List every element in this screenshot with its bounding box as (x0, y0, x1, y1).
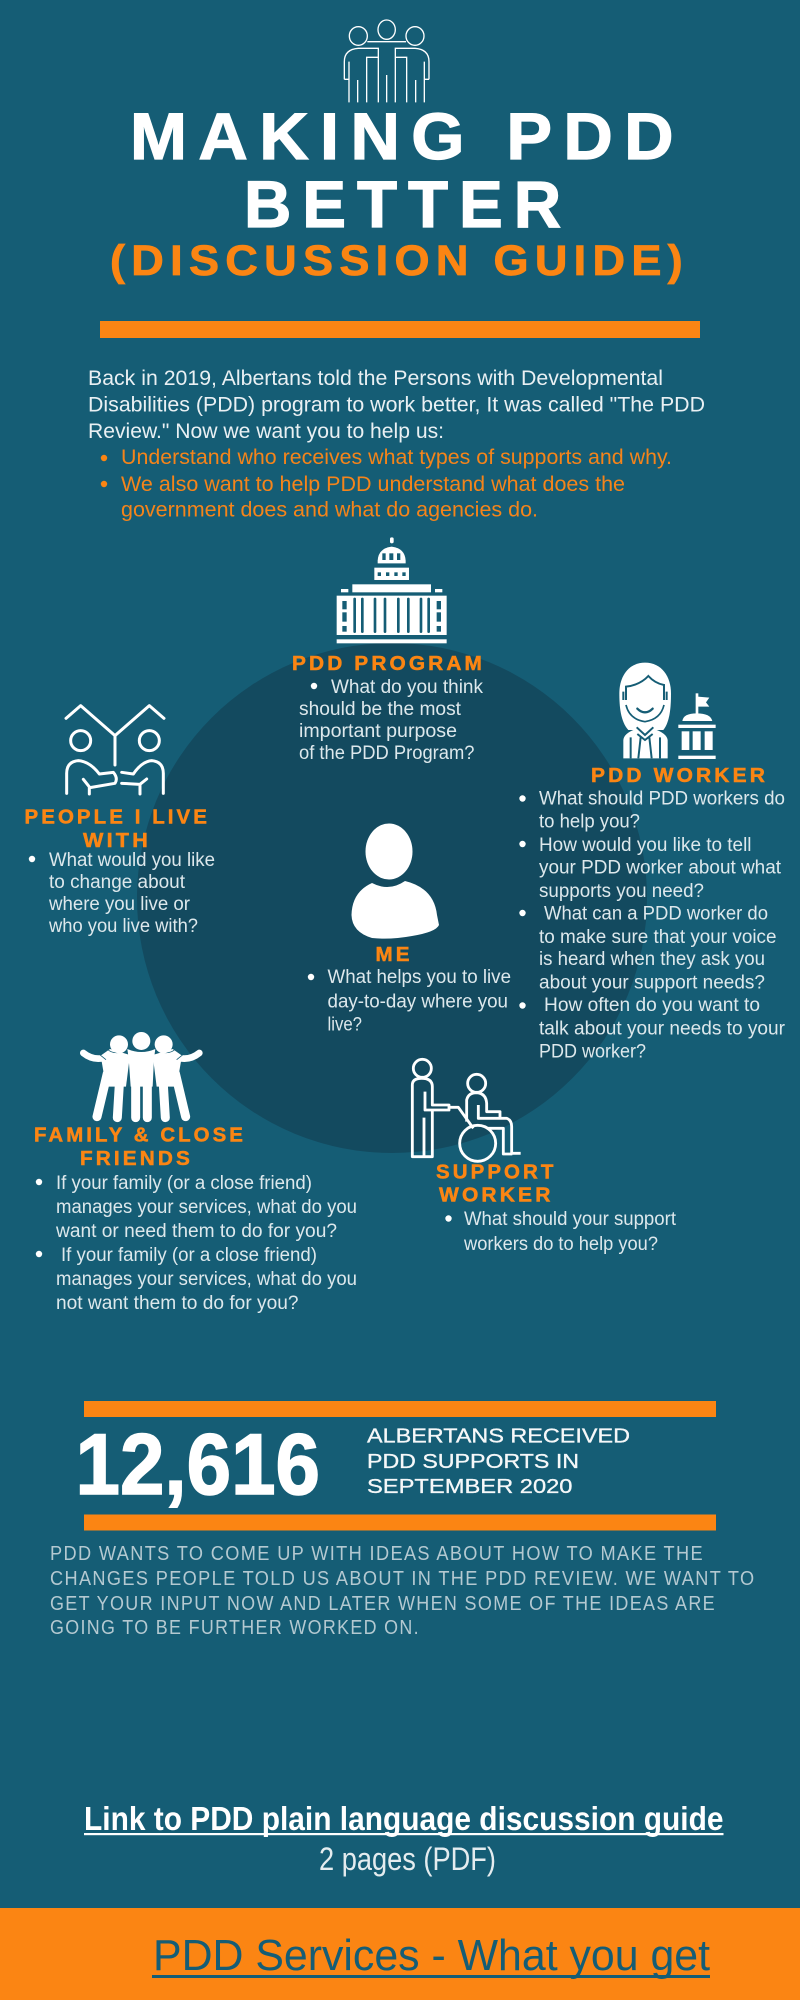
heading: support worker: WORKER (439, 1184, 554, 1206)
heading: PDD worker: PDD WORKER (591, 765, 768, 787)
icon: three friends arm in arm (83, 1032, 199, 1118)
panel: statistic (76, 1401, 716, 1530)
questions: people I live with: where you live or (48, 894, 191, 915)
questions: support worker (445, 1209, 677, 1255)
heading: PDD program: PDD PROGRAM (292, 653, 485, 675)
intro bullets: Understand who receives what types of supports and why. (121, 446, 672, 469)
questions: PDD worker: How would you like to tell (539, 835, 752, 856)
explanatory paragraph: PDD WANTS TO COME UP WITH IDEAS ABOUT HOW TO MAKE THE (50, 1543, 704, 1565)
questions: PDD worker: to help you? (539, 812, 640, 832)
questions: PDD program: of the PDD Program? (299, 743, 474, 764)
questions: people I live with: What would you like (49, 850, 215, 871)
panel: people I live with (24, 706, 215, 937)
questions: people I live with: to change about (49, 872, 186, 893)
panel: support worker (412, 1059, 677, 1255)
link: discussion guide: Link to PDD plain language discussion guide (84, 1800, 724, 1837)
questions: family and close friends (36, 1173, 357, 1314)
intro text (88, 367, 705, 522)
heading: family and close friends: FRIENDS (80, 1148, 193, 1170)
panel: me (308, 824, 511, 1036)
questions: family and close friends: not want them to do for you? (56, 1293, 298, 1314)
intro text: Disabilities (PDD) program to work better, It was called "The PDD (88, 394, 705, 416)
questions: me: live? (328, 1014, 362, 1036)
icon: person silhouette (352, 824, 439, 939)
questions: family and close friends: manages your services, what do you (56, 1197, 357, 1218)
questions: PDD worker: to make sure that your voice (539, 927, 776, 948)
questions: PDD worker: talk about your needs to your (539, 1018, 786, 1040)
link note: 2 pages (PDF) (319, 1841, 496, 1877)
questions: PDD program: What do you think (331, 677, 483, 698)
heading: people I live with: PEOPLE I LIVE (24, 806, 210, 828)
questions: PDD worker: is heard when they ask you (539, 949, 765, 970)
link: discussion guide (84, 1800, 724, 1877)
questions: me: day-to-day where you (328, 992, 508, 1012)
questions: family and close friends: manages your services, what do you (56, 1269, 357, 1290)
questions: PDD worker: about your support needs? (539, 972, 765, 994)
questions: PDD worker: your PDD worker about what (539, 858, 782, 878)
questions: PDD worker (519, 788, 786, 1062)
intro text: Review." Now we want you to help us: (88, 420, 444, 443)
questions: PDD worker: How often do you want to (544, 995, 760, 1016)
icon: support worker pushing wheelchair (412, 1059, 521, 1161)
subtitle: (DISCUSSION GUIDE) (110, 237, 689, 285)
footer link: PDD Services - What you get (153, 1931, 710, 1980)
title (130, 99, 685, 241)
orange divider bar (100, 321, 700, 338)
questions: PDD worker: What should PDD workers do (539, 788, 785, 810)
questions: PDD worker: PDD worker? (539, 1042, 646, 1062)
questions: family and close friends: If your family (or a close friend) (56, 1173, 312, 1194)
heading: family and close friends: FAMILY & CLOSE (34, 1124, 246, 1146)
heading: support worker: SUPPORT (436, 1162, 556, 1184)
questions: people I live with: who you live with? (48, 916, 198, 937)
heading: me: ME (376, 944, 412, 966)
questions: me: What helps you to live (328, 967, 511, 988)
intro bullets (101, 446, 672, 522)
explanatory paragraph: GET YOUR INPUT NOW AND LATER WHEN SOME OF THE IDEAS ARE (50, 1593, 716, 1615)
questions: PDD worker: supports you need? (539, 881, 704, 902)
intro bullets: government does and what do agencies do. (121, 498, 538, 522)
questions: support worker: What should your support (464, 1209, 677, 1230)
heading: people I live with: WITH (83, 830, 151, 852)
questions: people I live with (29, 850, 215, 937)
heading: people I live with (24, 806, 210, 852)
questions: PDD program: should be the most (299, 699, 462, 720)
panel: family and close friends (34, 1032, 357, 1314)
questions: support worker: workers do to help you? (463, 1234, 658, 1255)
heading: family and close friends (34, 1124, 246, 1170)
stat top bar (84, 1401, 716, 1417)
header section (110, 20, 689, 285)
footer band (0, 1908, 800, 2000)
panel: PDD worker (519, 663, 786, 1062)
stat description: SEPTEMBER 2020 (367, 1475, 572, 1498)
big number: 12,616 (76, 1417, 320, 1513)
explanatory paragraph (50, 1543, 756, 1639)
questions: PDD worker: What can a PDD worker do (544, 904, 768, 924)
stat description (367, 1424, 630, 1498)
questions: PDD program (299, 677, 483, 764)
icon: PDD worker and government building (619, 663, 716, 759)
stat description: ALBERTANS RECEIVED (367, 1424, 630, 1448)
icon: capitol building (337, 537, 447, 643)
stat description: PDD SUPPORTS IN (367, 1450, 579, 1473)
questions: me (308, 967, 511, 1036)
title: BETTER (244, 167, 572, 241)
questions: family and close friends: want or need them to do for you? (55, 1221, 337, 1242)
panel: PDD program (292, 537, 485, 764)
heading: support worker (436, 1162, 556, 1206)
questions: PDD program: important purpose (299, 721, 457, 742)
intro text: Back in 2019, Albertans told the Persons with Developmental (88, 367, 663, 390)
explanatory paragraph: GOING TO BE FURTHER WORKED ON. (50, 1617, 420, 1639)
icon: two people under shared roof (66, 706, 164, 794)
stat bottom bar (84, 1514, 716, 1530)
title: MAKING PDD (130, 99, 685, 173)
icon: three people outline (344, 20, 429, 102)
questions: family and close friends: If your family (or a close friend) (61, 1245, 317, 1266)
intro bullets: We also want to help PDD understand what does the (121, 473, 625, 496)
